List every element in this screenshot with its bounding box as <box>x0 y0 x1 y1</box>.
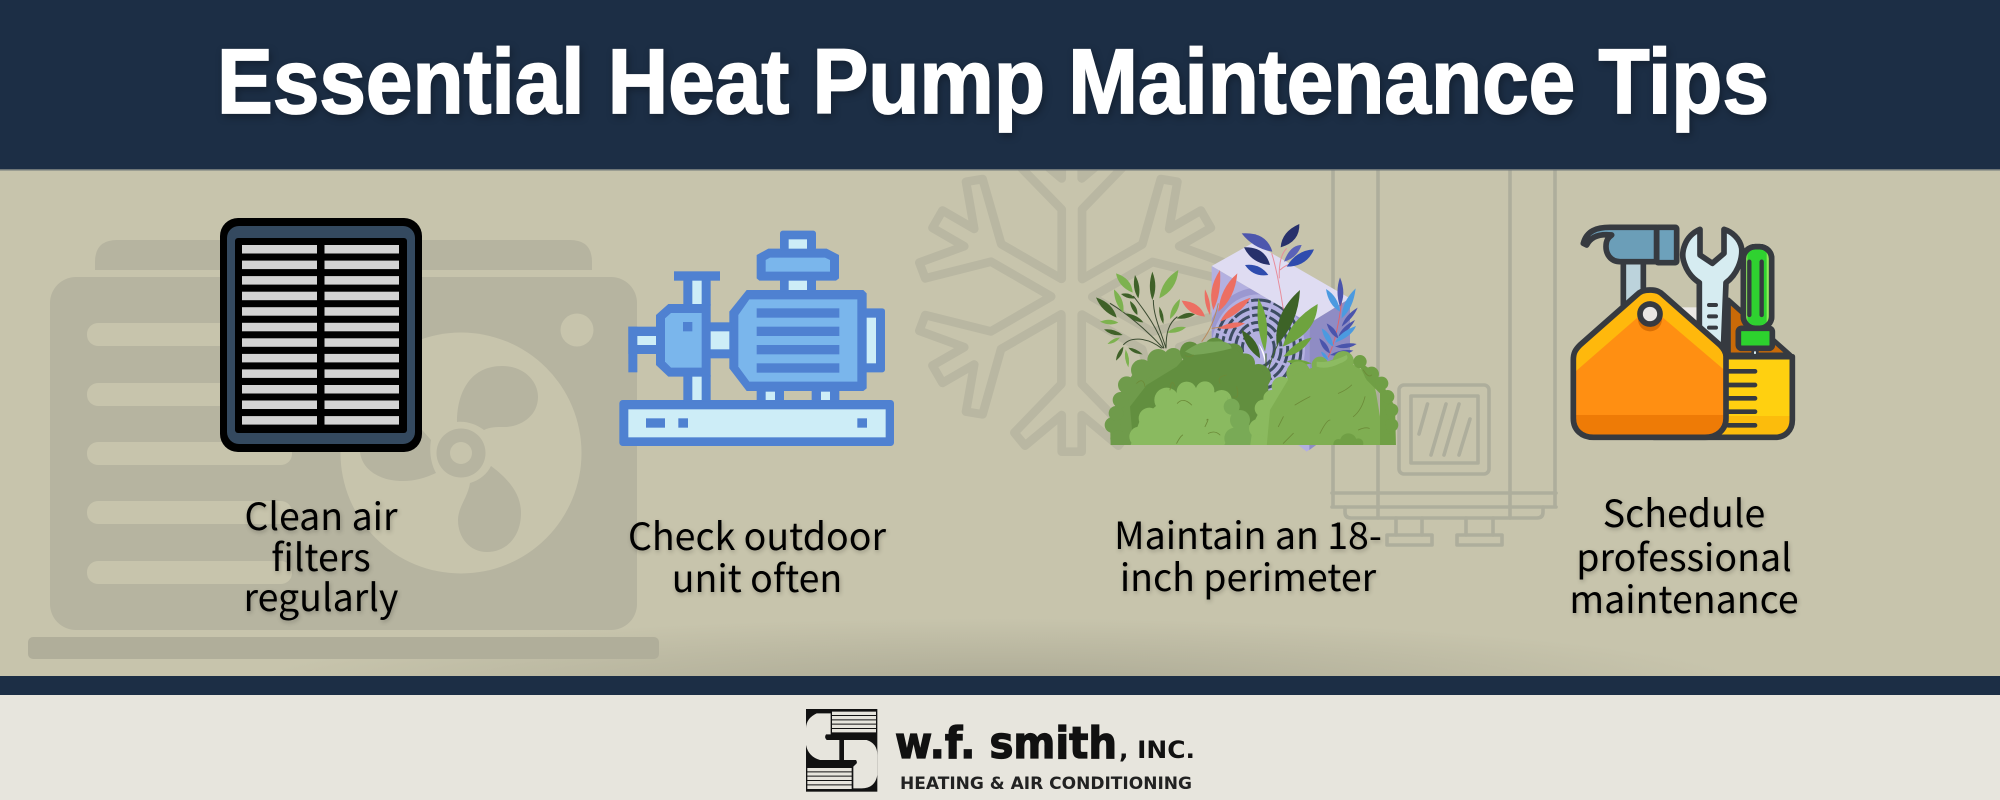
label: check outdoor unit <box>628 506 886 603</box>
label: clean air filters: regularly <box>244 567 399 622</box>
front right bush <box>1249 351 1398 450</box>
header band <box>0 0 2000 169</box>
icon: plants and bushes around outdoor unit <box>1096 224 1398 452</box>
blue plant <box>1319 277 1358 360</box>
soft shadow at bottom of body <box>481 639 1518 676</box>
twig cracks on bushes <box>1137 355 1372 443</box>
logo name: w.f. smith <box>895 718 1117 769</box>
screwdriver <box>1738 247 1772 357</box>
hammer <box>1583 227 1677 305</box>
label: maintain perimeter: inch perimeter <box>1120 547 1377 602</box>
logo inc: , INC. <box>1119 736 1195 764</box>
bushes <box>1105 338 1398 450</box>
label: check outdoor unit: Check outdoor <box>628 506 886 561</box>
label: clean air filters: filters <box>271 527 371 582</box>
label: schedule maintenance <box>1569 483 1799 624</box>
background: indoor furnace outline <box>1332 170 1556 545</box>
logo tagline: HEATING & AIR CONDITIONING <box>900 774 1192 794</box>
label: check outdoor unit: unit often <box>672 548 842 603</box>
green sprig <box>1096 270 1195 367</box>
front left bush <box>1129 381 1257 449</box>
heat pump cabinet behind plants <box>1208 243 1350 452</box>
label: clean air filters: Clean air <box>244 486 398 541</box>
label: maintain perimeter: Maintain an 18- <box>1114 505 1382 560</box>
wrench <box>1683 229 1742 350</box>
coral plant <box>1182 270 1251 342</box>
dark divider band <box>0 676 2000 695</box>
yellow box front <box>1653 357 1793 439</box>
footer band <box>0 695 2000 800</box>
label: schedule maintenance: maintenance <box>1569 569 1799 624</box>
label: schedule maintenance: Schedule <box>1603 483 1765 538</box>
panel: tan body background <box>0 170 2000 676</box>
icon: toolbox with hammer, wrench and screwdriver <box>1572 227 1793 440</box>
navy plant <box>1242 224 1314 309</box>
box back <box>1728 300 1790 355</box>
label: schedule maintenance: professional <box>1576 527 1792 582</box>
logo mark <box>806 709 877 792</box>
icon: outdoor pump unit <box>619 231 894 446</box>
logo: W.F. Smith, Inc. <box>806 709 1195 794</box>
label: maintain perimeter <box>1114 505 1382 602</box>
orange tag front <box>1572 288 1728 440</box>
background: outdoor AC unit silhouette <box>28 240 659 659</box>
background: snowflake outline <box>909 142 1235 452</box>
icon: air filter <box>220 218 422 452</box>
title: Essential Heat Pump Maintenance Tips <box>217 31 1769 133</box>
front green leaves <box>1242 290 1318 370</box>
label: clean air filters <box>244 486 399 622</box>
back dark bush <box>1105 338 1271 447</box>
